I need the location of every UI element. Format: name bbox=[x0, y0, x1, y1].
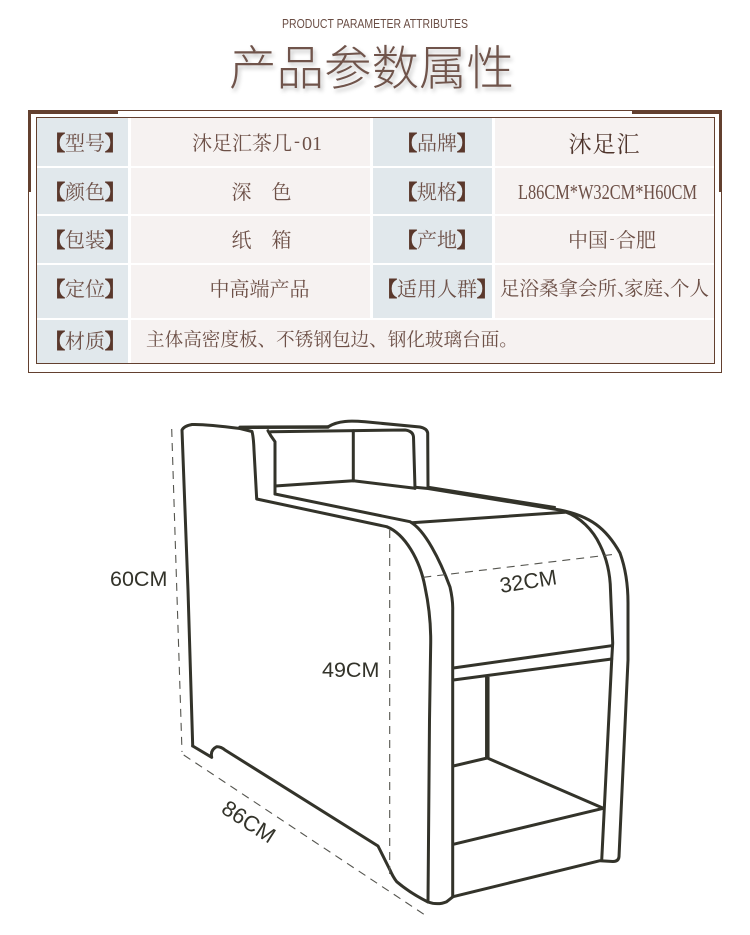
label: origin: 【 bbox=[397, 230, 417, 252]
label: model bbox=[37, 118, 128, 166]
dimension label: length 86CM: 86CM bbox=[217, 795, 280, 848]
label: model: 【 bbox=[45, 133, 65, 155]
value: audience: 、 bbox=[617, 279, 636, 300]
label: model: 】 bbox=[105, 133, 125, 155]
value: material bbox=[131, 320, 714, 363]
top front edge bbox=[412, 512, 565, 523]
lower shelf bbox=[485, 677, 490, 758]
value: packaging bbox=[131, 216, 370, 263]
value: audience bbox=[495, 265, 714, 318]
label: brand bbox=[373, 118, 492, 166]
value: audience: 足浴桑拿会所 家庭 个人 bbox=[500, 279, 709, 300]
label: packaging bbox=[37, 216, 128, 263]
drawer rails bbox=[453, 646, 612, 668]
dimension lines bbox=[172, 429, 617, 915]
label: colour: 颜色 bbox=[65, 182, 105, 204]
label: origin: 】 bbox=[457, 230, 477, 252]
value: positioning: 中高端产品 bbox=[210, 279, 310, 301]
value: colour bbox=[131, 168, 370, 214]
value: brand bbox=[495, 118, 714, 166]
label: positioning bbox=[37, 265, 128, 318]
label: size: 【 bbox=[397, 182, 417, 204]
label: packaging: 包装 bbox=[65, 230, 105, 252]
value: positioning bbox=[131, 265, 370, 318]
label: audience: 适用人群 bbox=[397, 279, 477, 301]
back wall and armrest bbox=[268, 431, 275, 494]
frame corner top-right bbox=[632, 111, 721, 192]
side panel outline bbox=[182, 421, 628, 904]
dimension label: height 60CM: 60CM bbox=[110, 567, 167, 591]
label: origin: 产地 bbox=[417, 230, 457, 252]
label: positioning: 【 bbox=[45, 279, 65, 301]
label: size: 】 bbox=[457, 182, 477, 204]
value: model: 沐足汇茶几 bbox=[192, 133, 292, 155]
label: colour: 】 bbox=[105, 182, 125, 204]
label: brand: 品牌 bbox=[417, 133, 457, 155]
label: colour bbox=[37, 168, 128, 214]
label: brand: 】 bbox=[457, 133, 477, 155]
value: model: - bbox=[292, 134, 302, 153]
value: brand: 沐足汇 bbox=[568, 132, 640, 156]
value: size bbox=[495, 168, 714, 214]
label: size: 规格 bbox=[417, 182, 457, 204]
label: origin bbox=[373, 216, 492, 263]
label: material bbox=[37, 320, 128, 363]
value: model bbox=[131, 118, 370, 166]
label: packaging: 【 bbox=[45, 230, 65, 252]
label: material: 【 bbox=[45, 330, 65, 352]
panel: parameter table bbox=[28, 110, 722, 373]
label: size bbox=[373, 168, 492, 214]
value: origin bbox=[495, 216, 714, 263]
value: material: 主体高密度板、不锈钢包边、钢化玻璃台面。 bbox=[146, 330, 518, 351]
value: model: 01 bbox=[302, 133, 322, 155]
title: 产品参数属性 bbox=[229, 30, 514, 99]
label: model: 型号 bbox=[65, 133, 105, 155]
label: positioning: 定位 bbox=[65, 279, 105, 301]
top rear double edge bbox=[415, 487, 628, 897]
label: material: 材质 bbox=[65, 330, 105, 352]
dimension label: 49CM: 49CM bbox=[322, 658, 379, 682]
front frame left edge bbox=[275, 494, 453, 897]
dimension label: depth 32CM: 32CM bbox=[498, 565, 558, 598]
label: packaging: 】 bbox=[105, 230, 125, 252]
label: brand: 【 bbox=[397, 133, 417, 155]
inner frame bbox=[36, 117, 715, 364]
label: audience: 【 bbox=[377, 279, 397, 301]
frame corner top-left bbox=[29, 111, 118, 192]
value: origin: - bbox=[608, 233, 616, 248]
label: positioning: 】 bbox=[105, 279, 125, 301]
label: audience bbox=[373, 265, 492, 318]
value: audience: 、 bbox=[663, 279, 683, 300]
value: colour: 深色 bbox=[232, 182, 312, 204]
value: origin: 中国 合肥 bbox=[568, 230, 656, 252]
label: audience: 】 bbox=[477, 279, 497, 301]
label: colour: 【 bbox=[45, 182, 65, 204]
value: packaging: 纸箱 bbox=[232, 230, 312, 252]
label: material: 】 bbox=[105, 330, 125, 352]
outer frame bbox=[28, 110, 722, 373]
